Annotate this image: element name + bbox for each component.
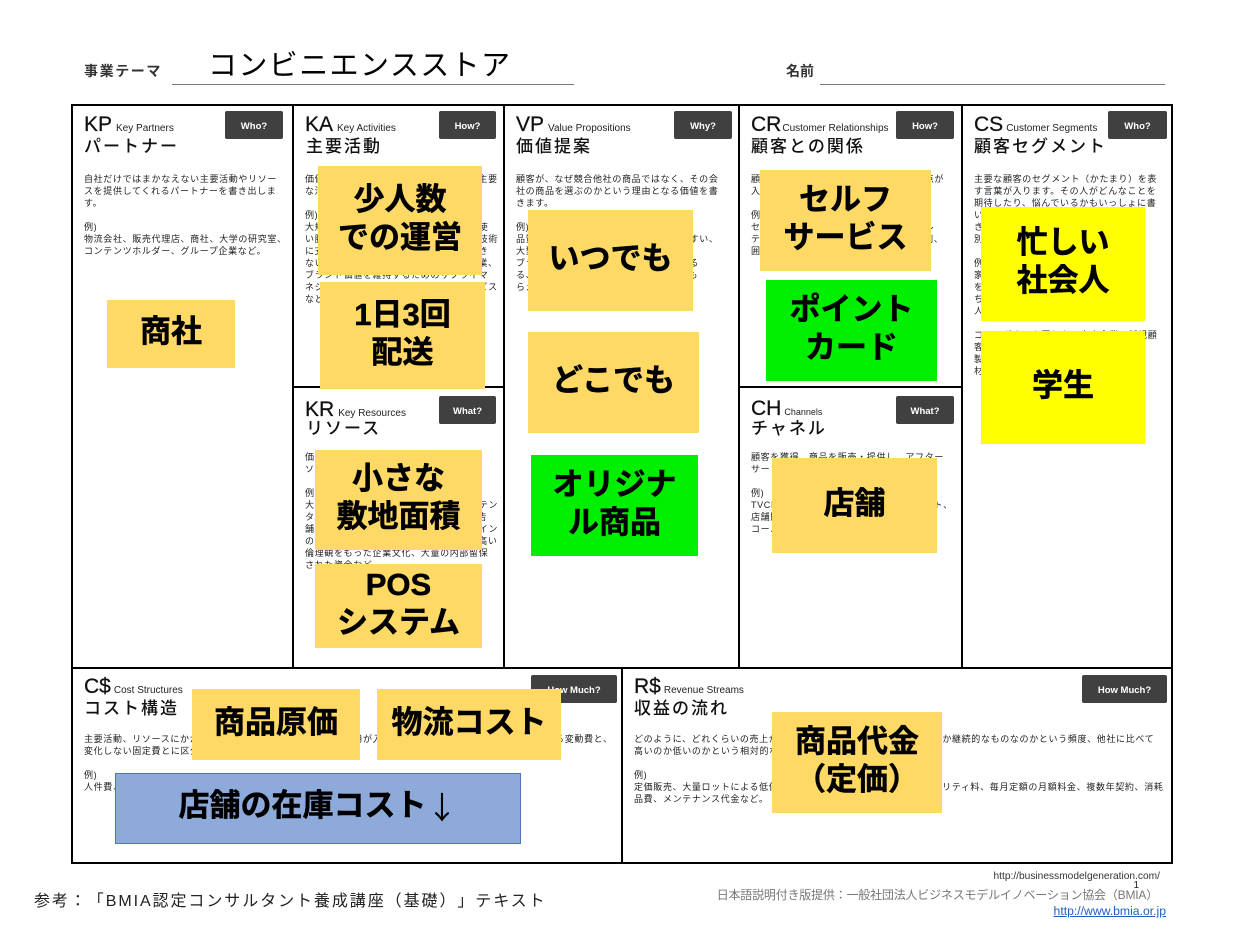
- CR description: 例): [751, 210, 764, 220]
- CH description: 顧客を獲得、商品を販売・提供し、アフター: [751, 452, 944, 462]
- panel: key resources: [305, 396, 498, 648]
- CS description: コストダウンを図りたい中小企業、新規顧: [974, 330, 1157, 340]
- What button: What?: [453, 406, 482, 417]
- KA description: に支えられた研究開発、他社が真似のでき: [305, 246, 488, 256]
- CS description: 例): [974, 258, 987, 268]
- CS description: 客を獲得したい企業、効率を上げたい: [974, 342, 1138, 352]
- How button: [439, 111, 496, 139]
- R$ description: どのように、どれくらいの売上があるのか、それは一回限りのものなのか継続的なものなのかという頻度、他社に比べて: [634, 734, 1154, 744]
- CR heading: CRCustomer Relationships: [751, 113, 889, 136]
- Why button: [674, 111, 732, 139]
- panel: channels: [751, 396, 954, 553]
- note: product price: [772, 712, 942, 813]
- KR description: タ、ブランド、顧客のデータベース、広告: [305, 512, 487, 522]
- VP heading: VP Value Propositions: [516, 113, 631, 136]
- CH heading: CH Channels: [751, 397, 822, 420]
- KP description: 例): [84, 222, 97, 232]
- CR description: テレサービス、コミュニティの提供、共創、: [751, 234, 943, 244]
- note: anytime: いつでも: [548, 240, 672, 276]
- VP description: ブランド力がある、価格が抑えられている: [516, 258, 699, 268]
- How button: [896, 111, 954, 139]
- CH description: コールセンターなど。: [751, 524, 847, 534]
- CS description: いておきます。顧客の規模は、大: [974, 210, 1117, 220]
- How button: How?: [912, 121, 938, 132]
- VP description: 品質が良い、デザインが良い、操作しやすい、: [516, 234, 719, 244]
- R$ description: 高いのか低いのかという相対的な価格水準も入ります。: [634, 746, 874, 756]
- CS description: [974, 174, 1157, 376]
- What button: What?: [910, 406, 940, 417]
- header: business theme: 事業テーマ: [84, 63, 162, 79]
- note: trading company: 商社: [140, 314, 202, 349]
- note: anytime: [528, 210, 693, 311]
- KR description: 大規模な工場、優秀な人材、特許、コンテン: [305, 500, 498, 510]
- CH description: [751, 452, 953, 534]
- Who button: [225, 111, 283, 139]
- VP description: [516, 174, 719, 292]
- CS description: 製造業、優秀な人材を採用したい人: [974, 354, 1128, 364]
- Who button: Who?: [241, 121, 267, 132]
- CS description: 主要な顧客のセグメント（かたまり）を表: [974, 174, 1157, 184]
- note: anywhere: [528, 332, 699, 433]
- CR description: 入ります。: [751, 186, 798, 196]
- note: small staff operation: 少人数: [354, 182, 446, 216]
- VP description: る、安心して使える、他社と比較をしても: [516, 270, 698, 280]
- CH description: TVCM、ダイレクトメール、インターネット、: [751, 500, 953, 510]
- How Much button: [1082, 675, 1167, 703]
- CR description: 顧客とどのような関係を築くのかという点が: [751, 174, 944, 184]
- CR description: セルフサービス、専任担当者、パーソナル: [751, 222, 934, 232]
- KR description: された資金など。: [305, 560, 382, 570]
- Why button: Why?: [690, 121, 716, 132]
- note: point card: カード: [805, 330, 898, 364]
- KR description: 価値提案を実現するために必要となるリ: [305, 452, 478, 462]
- C$ description: 主要活動、リソースにかかるコストなど、事業に必要な各種費用が入ります。販売量や生産量に応じて変化する変動費と、: [84, 734, 613, 744]
- CS heading: CS Customer Segments: [974, 113, 1097, 136]
- CS description: を持つ親、健康に関心のある自立: [974, 282, 1119, 292]
- note: point card: [766, 280, 937, 381]
- note: small staff operation: [318, 166, 482, 275]
- KA description: い勝手の良いデザインの開発、最先端の技術: [305, 234, 498, 244]
- header: business theme: [84, 50, 574, 85]
- KR description: ソースを書き出します。: [305, 464, 410, 474]
- note: small site area: 小さな: [352, 461, 445, 496]
- R$ Japanese heading: 収益の流れ: [634, 699, 729, 718]
- note: original products: [531, 455, 698, 556]
- CR description: [751, 174, 944, 256]
- Who button: [1108, 111, 1167, 139]
- header: name: 名前: [786, 63, 814, 79]
- note: self service: サービス: [784, 220, 908, 254]
- VP description: きます。: [516, 198, 554, 208]
- CH Japanese heading: チャネル: [751, 419, 827, 438]
- CH description: 例): [751, 488, 764, 498]
- C$ Japanese heading: コスト構造: [84, 699, 179, 718]
- CS description: ちた高齢者、忙しい社会: [974, 294, 1080, 304]
- footer: credits: 日本語説明付き版提供：一般社団法人ビジネスモデルイノベーション協会（BMIA）: [717, 888, 1158, 902]
- note: self service: [760, 170, 931, 271]
- VP description: らえる、など。: [516, 282, 583, 292]
- VP description: 顧客が、なぜ競合他社の商品ではなく、その会: [516, 174, 718, 184]
- note: original products: オリジナ: [552, 466, 676, 502]
- note: store inventory cost down: [115, 773, 521, 844]
- CS description: す言葉が入ります。その人がどんなことを: [974, 186, 1156, 196]
- note: busy workers: [981, 207, 1145, 321]
- note: store inventory cost down: 店舗の在庫コスト: [178, 788, 426, 822]
- KA description: ネジメント、徹底された品質管理、サービス: [305, 282, 498, 292]
- note: store inventory cost down: ↓: [426, 782, 458, 828]
- KR Japanese heading: リソース: [306, 419, 381, 438]
- note: three deliveries per day: [320, 282, 485, 389]
- note: self service: セルフ: [799, 182, 892, 216]
- What button: [896, 396, 954, 424]
- Who button: Who?: [1124, 121, 1151, 132]
- note: busy workers: 社会人: [1016, 263, 1110, 298]
- KA description: ない仕組みづくり、顧客の声を集める営業、: [305, 258, 498, 268]
- CS description: 材会社など。: [974, 366, 1031, 376]
- C$ heading: C$ Cost Structures: [84, 675, 183, 698]
- VP Japanese heading: 価値提案: [516, 137, 592, 156]
- KP description: スを提供してくれるパートナーを書き出しま: [84, 186, 276, 196]
- KR heading: KR Key Resources: [305, 398, 406, 421]
- footer: credits: http://www.bmia.or.jp: [1054, 904, 1166, 918]
- R$ description: [634, 734, 1164, 804]
- R$ description: 例): [634, 770, 647, 780]
- How button: How?: [455, 121, 480, 132]
- CS description: 期待したり、悩んでいるかもいっしょに書: [974, 198, 1156, 208]
- C$ description: 例): [84, 770, 97, 780]
- KP heading: KP Key Partners: [84, 113, 174, 136]
- KA description: [305, 174, 498, 304]
- header: business theme: コンビニエンスストア: [208, 50, 511, 82]
- KA heading: KA Key Activities: [305, 113, 396, 136]
- note: POS system: [315, 564, 482, 648]
- KA Japanese heading: 主要活動: [306, 137, 382, 156]
- note: point card: ポイント: [790, 292, 914, 326]
- note: logistics cost: 物流コスト: [392, 704, 546, 740]
- note: small site area: [315, 450, 482, 550]
- footer: credits: [717, 871, 1166, 918]
- note: original products: ル商品: [568, 504, 661, 540]
- panel: revenue streams: [634, 675, 1167, 813]
- KA description: などです。: [305, 294, 352, 304]
- footer: reference note: 参考：「BMIA認定コンサルタント養成講座（基礎）」テキスト: [34, 893, 547, 910]
- note: product price: 商品代金: [795, 724, 919, 758]
- C$ description: 人件費、原材料費、賃料、広告宣伝費など。: [84, 782, 277, 792]
- footer: credits: 1: [1133, 880, 1139, 891]
- panel: key activities: [305, 111, 498, 389]
- KR description: 舗網、専門知識を持つ社員、優れたデザイン: [305, 524, 498, 534]
- note: POS system: システム: [337, 605, 460, 640]
- How Much button: How Much?: [1098, 685, 1151, 696]
- note: product price: （定価）: [795, 762, 919, 796]
- note: stores: [772, 458, 937, 553]
- note: stores: 店舗: [824, 486, 886, 520]
- note: busy workers: 忙しい: [1016, 225, 1110, 260]
- note: trading company: [107, 300, 235, 368]
- R$ heading: R$ Revenue Streams: [634, 675, 744, 698]
- KR description: の高い技術力、強いパートナーシップ、高い: [305, 536, 498, 546]
- note: small site area: 敷地面積: [336, 499, 460, 534]
- CS description: 別できます。: [974, 234, 1031, 244]
- KP description: す。: [84, 198, 102, 208]
- note: POS system: POS: [366, 567, 431, 602]
- KR description: [305, 452, 498, 570]
- C$ description: 変化しない固定費とに区分して記入します。: [84, 746, 276, 756]
- R$ description: 品費、メンテナンス代金など。: [634, 794, 768, 804]
- note: product cost: [192, 689, 360, 760]
- KP description: [84, 174, 287, 256]
- How Much button: [531, 675, 617, 703]
- KA description: 価値提案を実現するために必要となる、主要: [305, 174, 498, 184]
- CS Japanese heading: 顧客セグメント: [974, 137, 1107, 156]
- KA description: 大規模工場での生産、ノウハウを持った使: [305, 222, 488, 232]
- panel: value propositions: [516, 111, 732, 556]
- CS description: きく分けて、個人と法人などに大: [974, 222, 1118, 232]
- note: students: [981, 331, 1145, 444]
- What button: [439, 396, 496, 424]
- note: logistics cost: [377, 689, 561, 760]
- VP description: 社の商品を選ぶのかという理由となる価値を書: [516, 186, 718, 196]
- panel: customer segments: [974, 111, 1167, 444]
- panel: customer relationships: [751, 111, 954, 381]
- KR description: 例): [305, 488, 318, 498]
- note: small staff operation: での運営: [338, 220, 462, 254]
- C$ description: [84, 734, 613, 792]
- KP description: 自社だけではまかなえない主要活動やリソー: [84, 174, 277, 184]
- note: students: 学生: [1032, 368, 1094, 402]
- footer: credits: http://businessmodelgeneration.com/: [994, 871, 1160, 882]
- KP Japanese heading: パートナー: [84, 137, 179, 156]
- CR Japanese heading: 顧客との関係: [751, 137, 865, 156]
- CH description: 店舗販売、訪問販売、代理店、パートナー、: [751, 512, 944, 522]
- KP description: 物流会社、販売代理店、商社、大学の研究室、: [84, 234, 287, 244]
- panel: key partners: [84, 111, 287, 368]
- KA description: ブランド価値を維持するためのサプライマ: [305, 270, 488, 280]
- note: product cost: 商品原価: [214, 704, 338, 740]
- How Much button: How Much?: [547, 685, 601, 696]
- note: anywhere: どこでも: [552, 362, 675, 398]
- panel: cost structures: [84, 675, 617, 844]
- R$ description: 定価販売、大量ロットによる低価格販売、広告、ライセンス料、ロイヤリティ料、毎月定額の月額料金、複数年契約、消耗: [634, 782, 1164, 792]
- KP description: コンテンツホルダー、グループ企業など。: [84, 246, 266, 256]
- CR description: 囲い込みなど。: [751, 246, 818, 256]
- KA description: な活動を書き出します。: [305, 186, 410, 196]
- KR description: 倫理観をもった企業文化、大量の内部留保: [305, 548, 488, 558]
- CH description: サービスを行う経路です。: [751, 464, 866, 474]
- CS description: 家族を持つ人、子育て中の大学生: [974, 270, 1119, 280]
- CS description: 人など。: [974, 306, 1012, 316]
- VP description: 例): [516, 222, 529, 232]
- VP description: 大型で見やすい、小型で持ち運びやすい、: [516, 246, 699, 256]
- note: three deliveries per day: 1日3回: [354, 296, 451, 332]
- KA description: 例): [305, 210, 318, 220]
- note: three deliveries per day: 配送: [371, 334, 433, 370]
